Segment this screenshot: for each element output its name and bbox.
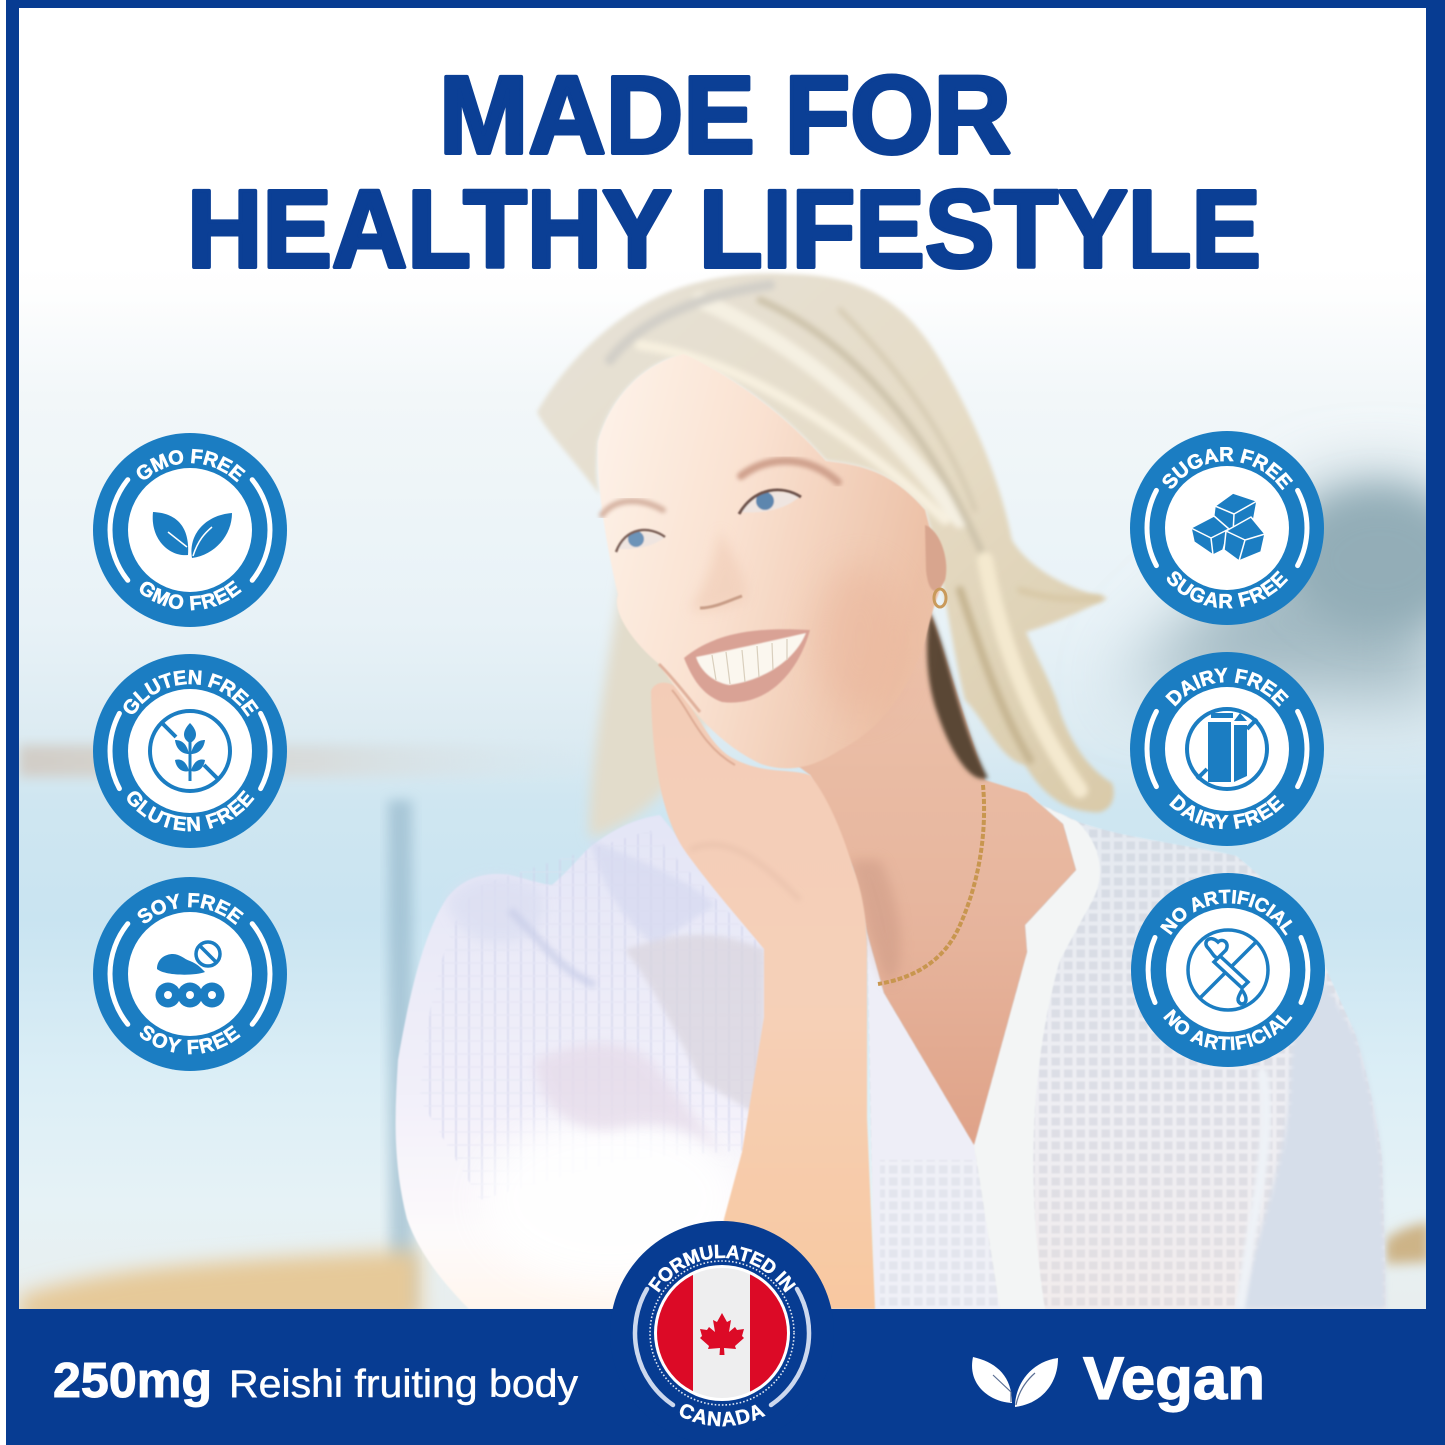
- badge: soy free: SOY FREE: [138, 892, 244, 925]
- teeth: [696, 633, 806, 685]
- badge: dairy free: DAIRY FREE: [1169, 794, 1284, 830]
- icon: leaves: [153, 512, 232, 558]
- vegan label: Vegan: [1083, 1345, 1265, 1412]
- neck and chest: [790, 610, 1076, 1145]
- badge: no artificial: [1131, 873, 1325, 1067]
- white ring: [654, 1265, 790, 1401]
- maple leaf: [700, 1313, 744, 1355]
- forearm and hand: [651, 683, 875, 1309]
- fingers: [672, 690, 735, 765]
- badge: gluten free: [93, 654, 287, 848]
- badge: no artificial: NO ARTIFICIAL: [1160, 890, 1292, 936]
- necklace: [878, 785, 984, 984]
- badge: sugar free: [1130, 431, 1324, 625]
- hair strands: [610, 285, 1100, 790]
- left sleeve: [396, 815, 770, 1309]
- icon: crossed dropper: [1188, 930, 1268, 1010]
- Canada seal: [612, 1221, 832, 1426]
- icon: crossed wheat: [150, 711, 230, 791]
- badge: GMO free: GMO FREE: [140, 580, 242, 610]
- badge: sugar free: SUGAR FREE: [1166, 570, 1288, 608]
- nose shading: [694, 540, 744, 611]
- hair main: [537, 273, 1114, 812]
- badge: soy free: [93, 877, 287, 1071]
- right sleeve: [1244, 981, 1388, 1309]
- earring: [934, 589, 946, 607]
- badge: gluten free: GLUTEN FREE: [124, 670, 259, 717]
- smile crease: [659, 664, 700, 712]
- badge: gluten free: GLUTEN FREE: [127, 790, 255, 832]
- nose line: [700, 596, 742, 608]
- icon: vegan leaves: [972, 1357, 1058, 1407]
- woman photo illustration: [396, 273, 1386, 1309]
- bottom bar: [6, 1309, 1445, 1445]
- blouse torso: [1034, 824, 1385, 1304]
- blouse left placket: [867, 932, 1000, 1309]
- hand crease: [690, 845, 800, 900]
- badge: GMO free: GMO FREE: [136, 448, 246, 482]
- title: [187, 54, 1261, 291]
- dosage label: Reishi fruiting body: [229, 1363, 579, 1406]
- flag: [657, 1268, 787, 1398]
- cheek shading: [816, 576, 887, 698]
- badge: GMO free: [93, 433, 287, 627]
- right eye: [739, 490, 801, 514]
- badge: no artificial: NO ARTIFICIAL: [1163, 1008, 1292, 1050]
- neck shade: [853, 860, 900, 975]
- badge: dairy free: DAIRY FREE: [1165, 668, 1289, 707]
- right eyebrow: [741, 461, 838, 482]
- badge: sugar free: SUGAR FREE: [1162, 447, 1294, 490]
- dotted ring: [650, 1261, 794, 1405]
- tooth separators: [712, 639, 787, 684]
- sleeve weave: [420, 830, 765, 1200]
- title line 1: MADE FOR: [439, 54, 1011, 177]
- lips and smile: [684, 629, 810, 703]
- torso tint: [1040, 825, 1258, 1309]
- seal ring arcs: [635, 1289, 809, 1405]
- seal text: FORMULATED IN: [648, 1244, 796, 1293]
- dosage amount: 250mg: [53, 1354, 212, 1408]
- face: [598, 354, 945, 768]
- collar and right placket: [974, 786, 1100, 1309]
- title line 2: HEALTHY LIFESTYLE: [187, 168, 1261, 291]
- shadow under hair: [927, 612, 988, 779]
- icon: crossed milk carton: [1187, 709, 1267, 789]
- ear: [925, 525, 946, 591]
- badge: soy free: SOY FREE: [140, 1025, 241, 1054]
- sleeve folds: [454, 845, 764, 1199]
- hair back lower left: [584, 588, 708, 840]
- left eyebrow: [602, 501, 663, 515]
- seal text: CANADA: [680, 1404, 766, 1426]
- placket lower grid: [880, 1160, 1000, 1309]
- icon: soybean pod: [156, 942, 224, 1008]
- left eye: [616, 530, 665, 552]
- badge: dairy free: [1130, 652, 1324, 846]
- icon: sugar cubes: [1191, 493, 1265, 561]
- sleeve crease: [1240, 1070, 1266, 1309]
- seal text: [648, 1244, 796, 1426]
